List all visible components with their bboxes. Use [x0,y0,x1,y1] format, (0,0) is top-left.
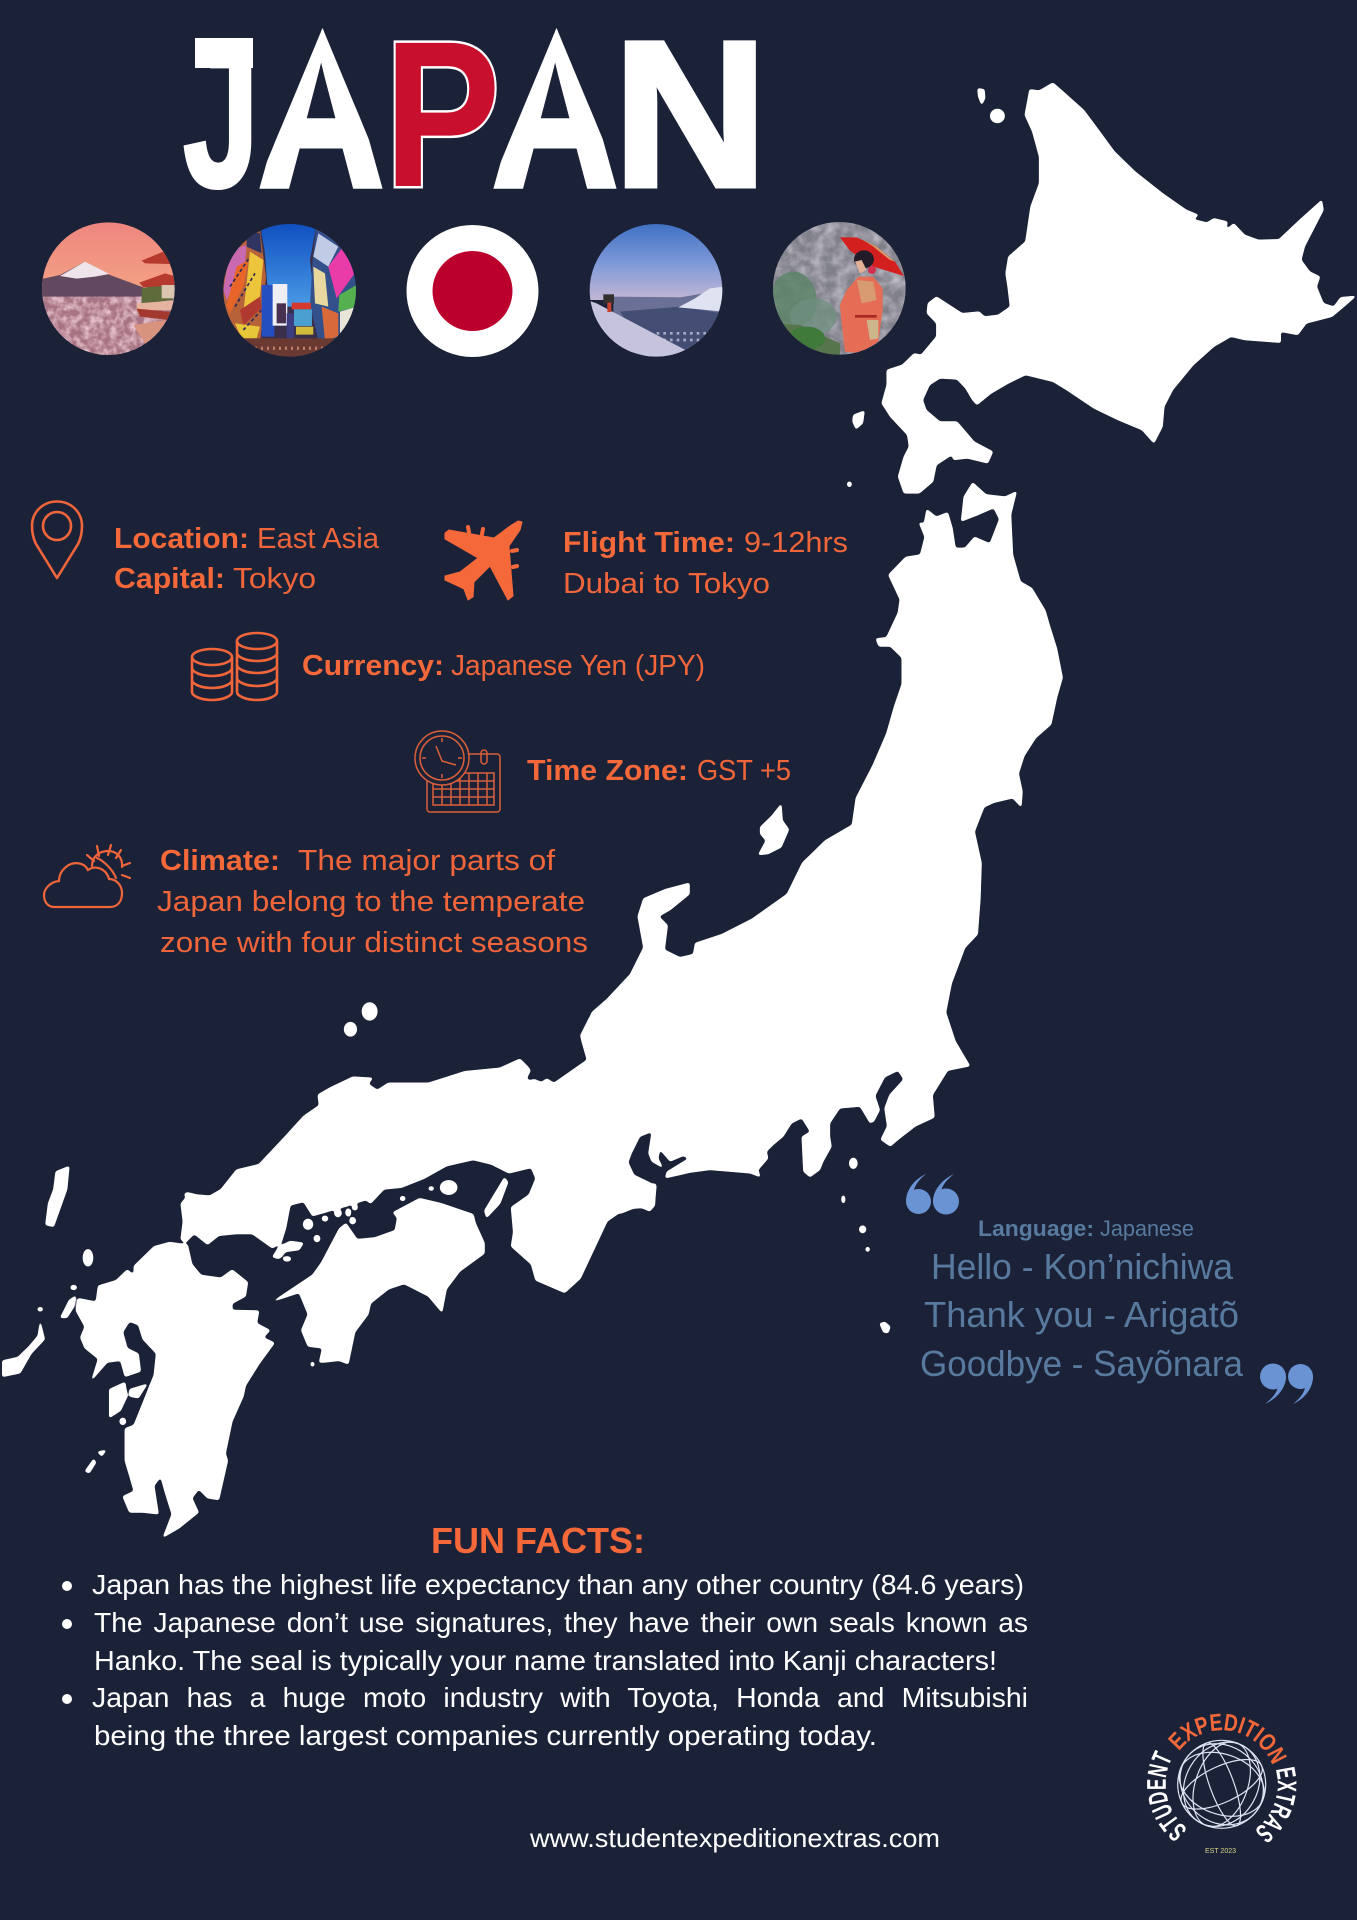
info: climate: The major parts of [298,845,555,877]
icon: map pin [32,502,82,578]
info: climate: Japan belong to the temperate [157,886,585,918]
map of Japan [2,83,1356,1537]
photo: skier and snowy mountain [587,220,727,360]
icon: clock and calendar [415,731,500,812]
info: flight time: Dubai to Tokyo [563,568,770,600]
logo: Student Expedition Extras: STUDENT [1147,1750,1186,1841]
info: flight time: 9-12hrs [744,527,848,559]
language phrases [906,1174,1313,1404]
fun facts list: Japan has a huge moto industry with Toyota, Honda and Mitsubishi [92,1682,1028,1713]
Hokkaido [848,83,1356,493]
fun facts list: Hanko. The seal is typically your name translated into Kanji characters! [94,1645,997,1676]
info: currency [192,633,705,700]
website address: www.studentexpeditionextras.com [529,1823,940,1853]
title: JAPAN: P [384,0,501,230]
language phrases: Hello - Kon’nichiwa [931,1246,1234,1287]
info: location and capital: Tokyo [233,563,316,595]
info: location and capital [32,502,379,595]
icon: Japanese flag [406,225,538,357]
info: time zone: Time Zone: [527,755,688,787]
icon: airplane [445,521,522,600]
language phrases: Thank you - Arigatõ [924,1294,1239,1335]
icon: closing quote [1260,1364,1313,1404]
photo: Tokyo neon street [220,220,360,360]
language phrases: Language: [978,1216,1094,1241]
info: flight time: Flight Time: [563,527,735,559]
icon: wire globe [1164,1727,1280,1842]
language phrases: Goodbye - Sayõnara [920,1343,1244,1384]
logo: Student Expedition Extras [1147,1714,1296,1855]
fun facts heading: FUN FACTS: [431,1520,645,1561]
icon: coin stacks [192,633,277,700]
fun facts list: being the three largest companies currently operating today. [94,1720,877,1751]
Honshu Tokai coast and islands [620,1090,891,1333]
Honshu north and east [500,482,1063,1146]
logo: Student Expedition Extras: EXTRAS [1256,1766,1296,1842]
photo: Mount Fuji with cherry blossoms [40,220,177,357]
title: JAPAN: J [183,0,259,231]
title: JAPAN [184,28,756,190]
logo: Student Expedition Extras: EXPEDITION [1168,1714,1287,1764]
icon: sun and cloud [44,845,130,907]
info: flight time [445,521,848,600]
fun facts list: The Japanese don’t use signatures, they have their own seals known as [94,1607,1028,1638]
info: location and capital: Location: [114,523,249,555]
info: time zone [415,731,791,812]
info: location and capital: East Asia [257,523,379,555]
info: climate [44,845,588,959]
info: currency: Currency: [302,650,444,682]
fun facts list [62,1569,1028,1751]
info: location and capital: Capital: [114,563,225,595]
photo: woman in kimono with red parasol [770,220,910,360]
info: climate: Climate: [160,845,280,877]
logo: Student Expedition Extras: EST 2023 [1205,1848,1236,1855]
icon: opening quote [906,1174,959,1214]
info: time zone: GST +5 [697,755,791,787]
title: JAPAN: N [613,0,768,230]
Honshu west, Shikoku, Kyushu and small islands [2,1000,661,1537]
info: currency: Japanese Yen (JPY) [451,650,705,682]
language phrases: Japanese [1100,1216,1194,1241]
info: climate: zone with four distinct seasons [160,927,588,959]
fun facts list: Japan has the highest life expectancy than any other country (84.6 years) [92,1569,1024,1600]
